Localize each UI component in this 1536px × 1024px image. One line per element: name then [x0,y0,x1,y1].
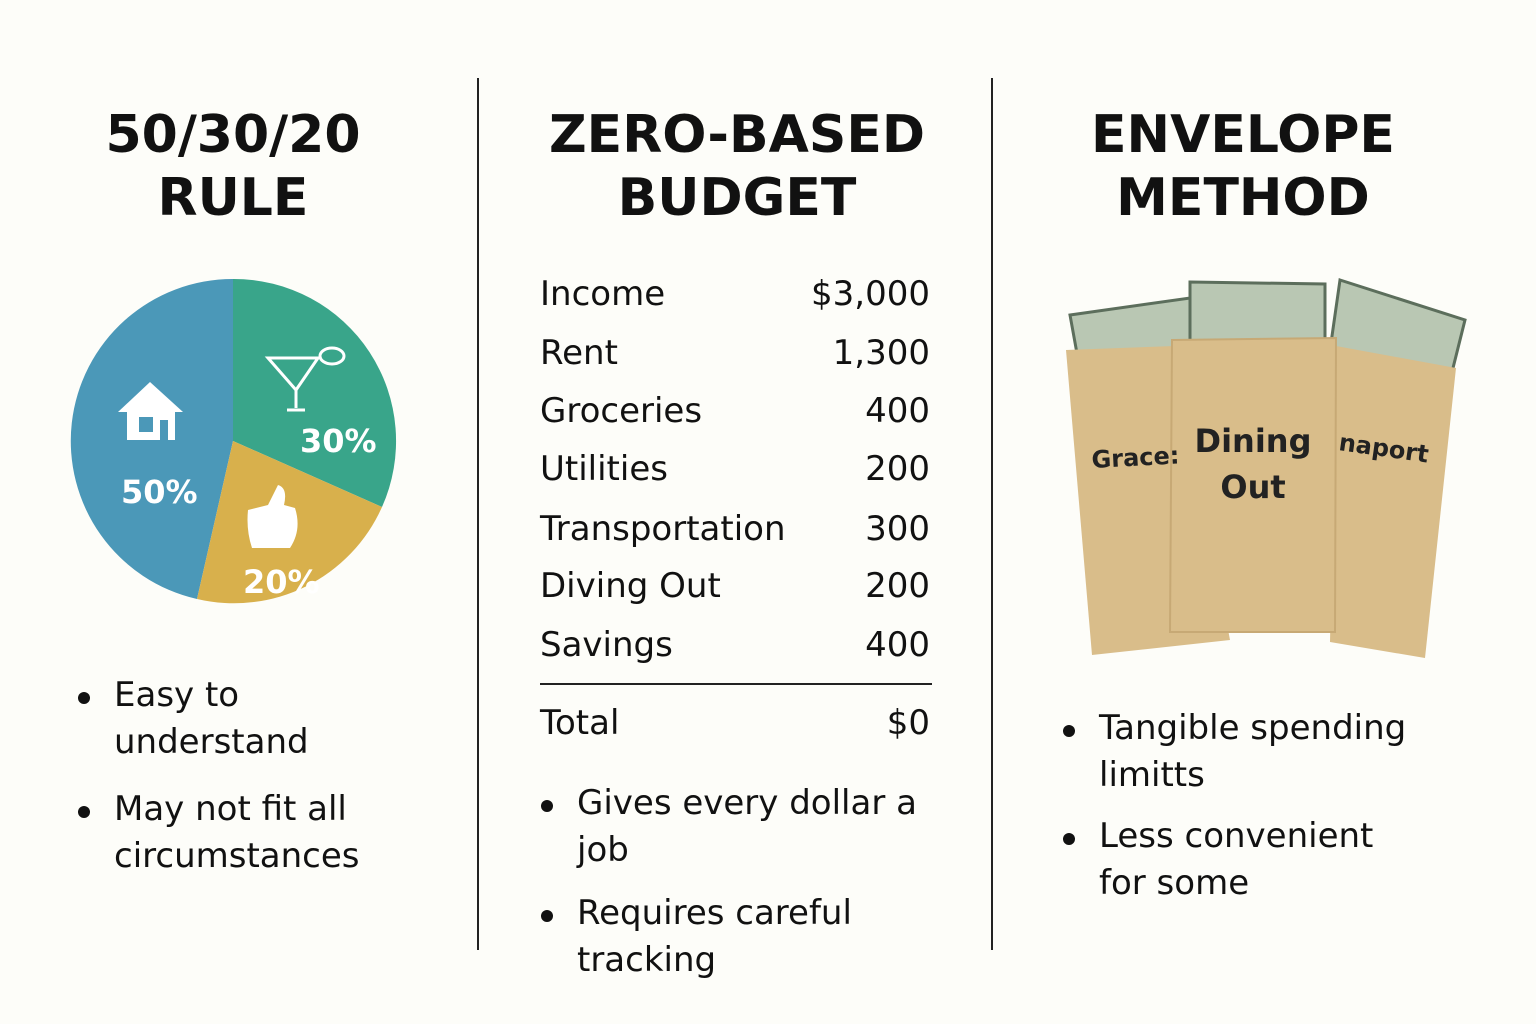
text: Less convenient [1099,816,1373,856]
bullets: zero-based [577,780,917,874]
text: Diving Out [540,566,721,606]
text: 300 [865,509,930,549]
envelopes illustration: Grace: [1091,441,1180,474]
bullets: envelope [1099,705,1406,799]
text: Requires careful [577,893,852,933]
text: 1,300 [833,333,930,373]
heading: zero-based budget: BUDGET [618,168,856,228]
bullets: zero-based: job [577,830,629,870]
envelopes illustration [1066,278,1467,658]
bullets: envelope: limitts [1099,755,1205,795]
text: $0 [887,703,930,743]
text: 400 [865,625,930,665]
envelopes illustration: naport [1337,428,1430,469]
text: 400 [865,391,930,431]
text: Groceries [540,391,702,431]
text: circumstances [114,836,360,876]
text: 200 [865,449,930,489]
heading: 50/30/20 rule [105,105,361,228]
bullets: 50/30/20: understand [114,722,309,762]
bullets: zero-based: Gives every dollar a [577,783,917,823]
heading: 50/30/20 rule: RULE [158,168,308,228]
text: Total [540,703,619,743]
text: Transportation [540,509,786,549]
text: Rent [540,333,618,373]
text: Income [540,274,665,314]
text: Savings [540,625,673,665]
icon: thumbs up [248,485,298,548]
budget table [540,274,932,743]
heading: envelope method: METHOD [1116,168,1370,228]
heading: 50/30/20 rule: 50/30/20 [105,105,361,165]
divider right [991,78,993,950]
heading: envelope method: ENVELOPE [1091,105,1395,165]
pie chart: 20% [243,563,320,601]
pie chart [70,279,396,604]
divider left [477,78,479,950]
text: for some [1099,863,1249,903]
bullets: envelope: Tangible spending [1099,708,1406,748]
text: $3,000 [811,274,930,314]
heading: zero-based budget: ZERO-BASED [549,105,925,165]
text: May not fit all [114,789,347,829]
envelopes illustration: Out [1220,468,1286,506]
pie chart: 30% [300,422,377,460]
bullets: 50/30/20: Easy to [114,675,239,715]
icon: house [118,382,183,440]
heading: envelope method [1091,105,1395,228]
text: 200 [865,566,930,606]
heading: zero-based budget [549,105,925,228]
text: tracking [577,940,716,980]
pie chart: 50% [121,473,198,511]
icon: cocktail [268,348,344,410]
bullets: 50/30/20 [114,672,309,766]
envelopes illustration: Dining [1195,422,1311,460]
text: Utilities [540,449,668,489]
